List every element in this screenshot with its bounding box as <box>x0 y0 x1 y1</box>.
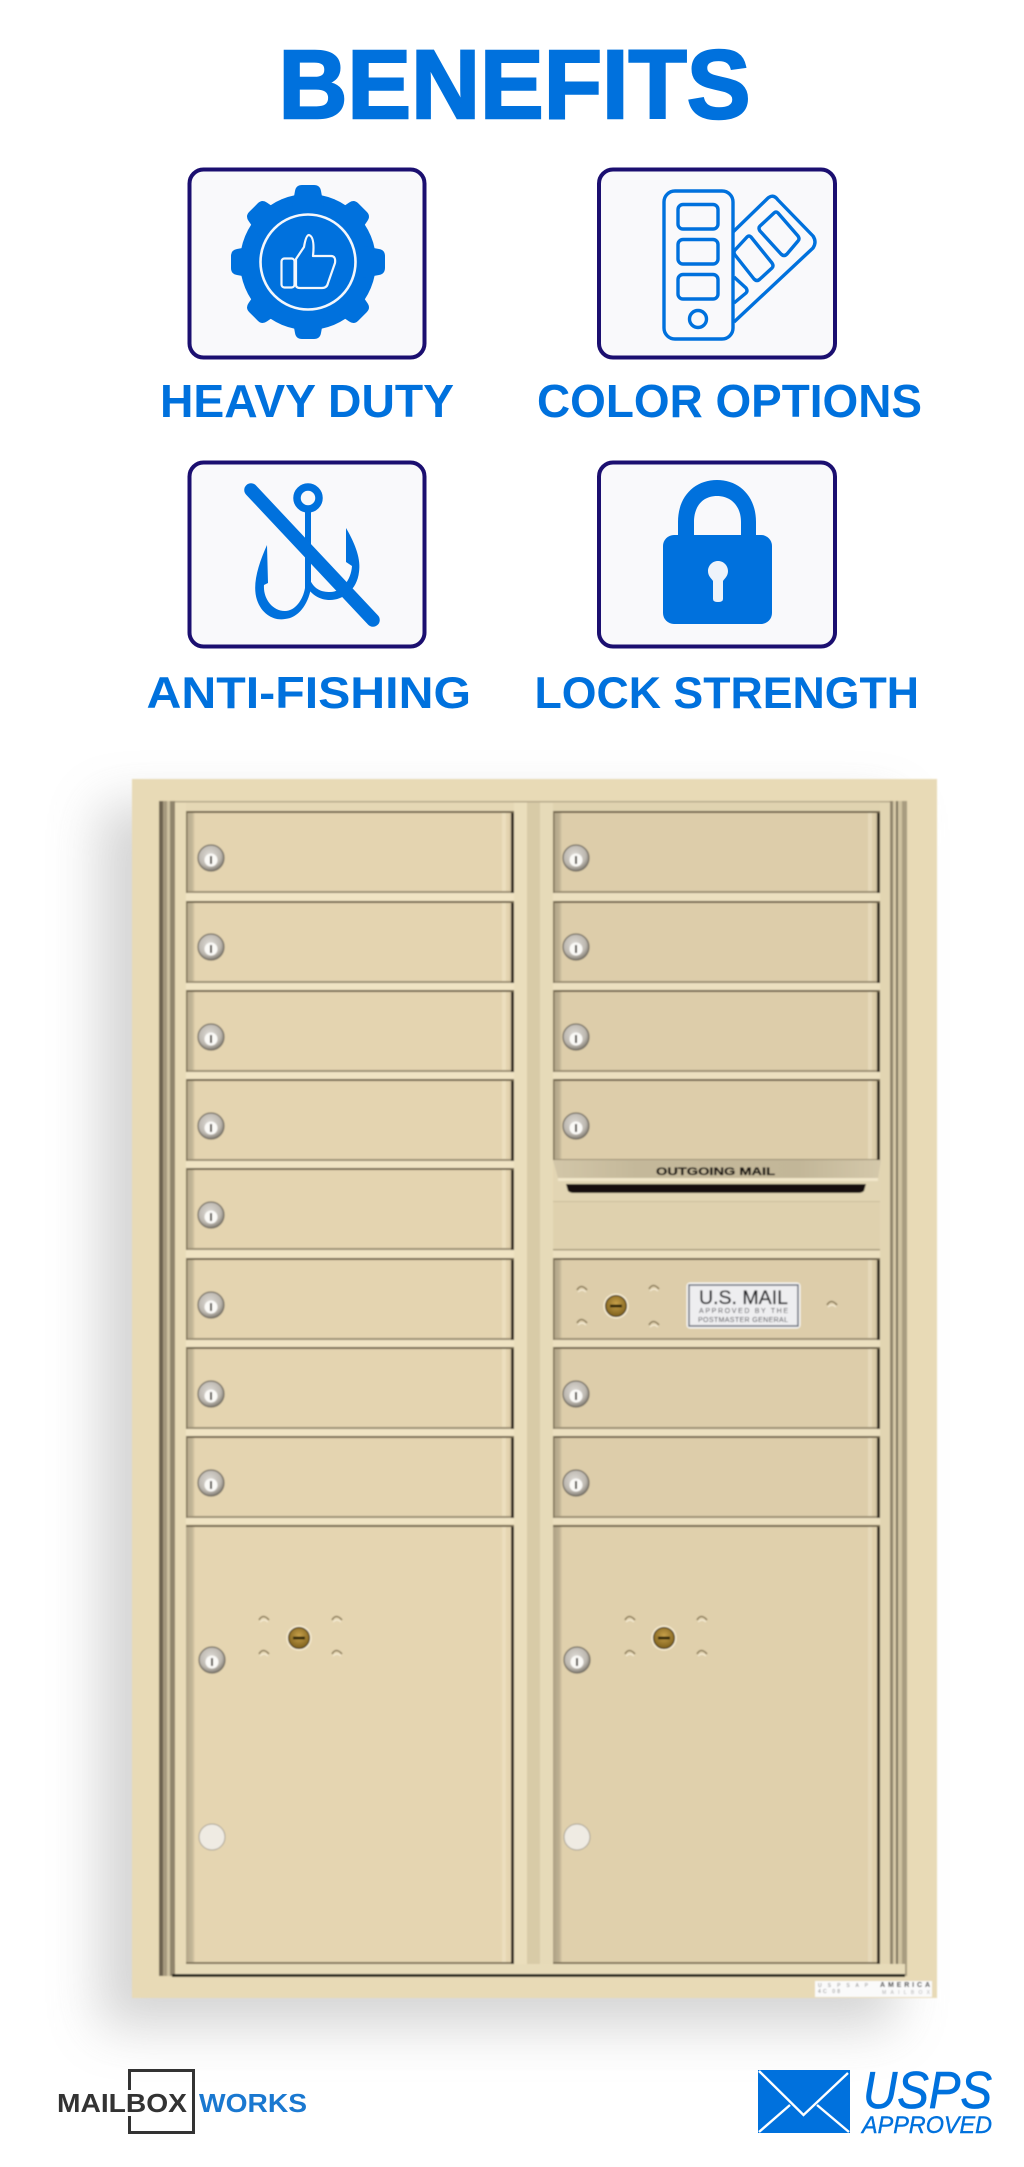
title: BENEFITS <box>278 30 750 139</box>
logo: USPS approved: APPROVED <box>860 2112 992 2139</box>
door strips <box>553 893 880 1159</box>
logo: Mailbox Works <box>57 2070 307 2132</box>
right parcel door <box>553 1525 880 1964</box>
outgoing mail slot <box>553 1160 881 1250</box>
logo: Mailbox Works: MAILBOX <box>57 2088 188 2118</box>
mailbox unit <box>132 779 937 1998</box>
U.S. Mail plate <box>687 1283 800 1328</box>
icon frame: anti-fishing <box>190 462 424 646</box>
manufacturer label: AMERICA <box>880 1982 930 1989</box>
icon: gear with thumbs up <box>231 185 385 339</box>
manufacturer label: U S P S A P <box>818 1983 869 1989</box>
icon frame: heavy duty <box>190 170 424 358</box>
label: anti-fishing: ANTI-FISHING <box>146 669 471 718</box>
icon: color swatch fan <box>664 191 815 339</box>
logo: USPS approved: USPS <box>863 2062 992 2120</box>
label: color options: COLOR OPTIONS <box>537 375 922 427</box>
door strips <box>186 893 514 1524</box>
manufacturer label <box>815 1981 932 1997</box>
panel: lock strength <box>534 462 919 718</box>
left column doors <box>186 811 514 1524</box>
U.S. Mail door hardware <box>577 1283 837 1328</box>
label: heavy duty: HEAVY DUTY <box>160 375 454 427</box>
outer frame <box>132 779 937 1998</box>
manufacturer label: MAILBOX <box>882 1990 931 1996</box>
U.S. Mail plate: POSTMASTER GENERAL <box>698 1317 788 1324</box>
logo: Mailbox Works: WORKS <box>199 2088 307 2118</box>
icon: envelope <box>758 2070 850 2133</box>
top strip <box>175 801 890 802</box>
left rails <box>159 801 186 1976</box>
U.S. Mail plate: U.S. MAIL <box>699 1288 788 1309</box>
manufacturer label: 4C 08 <box>818 1989 840 1995</box>
outgoing mail text: OUTGOING MAIL <box>656 1166 775 1178</box>
center post <box>514 801 553 1971</box>
right rails <box>880 801 907 1976</box>
panel: color options <box>537 170 922 427</box>
bottom black line <box>172 1974 905 1977</box>
icon: padlock <box>663 480 772 624</box>
icon frame: color options <box>599 170 835 358</box>
icon: crossed-out fish hook <box>251 487 373 620</box>
panel: heavy duty <box>160 170 454 427</box>
label: lock strength: LOCK STRENGTH <box>534 669 919 718</box>
logo: USPS approved <box>758 2062 992 2139</box>
mailbox drop shadow <box>100 805 895 2027</box>
U.S. Mail plate: APPROVED BY THE <box>699 1308 788 1315</box>
icon frame: lock strength <box>599 462 835 646</box>
panel: anti-fishing <box>146 462 471 718</box>
right column doors <box>553 811 880 1524</box>
left parcel door <box>186 1525 514 1964</box>
